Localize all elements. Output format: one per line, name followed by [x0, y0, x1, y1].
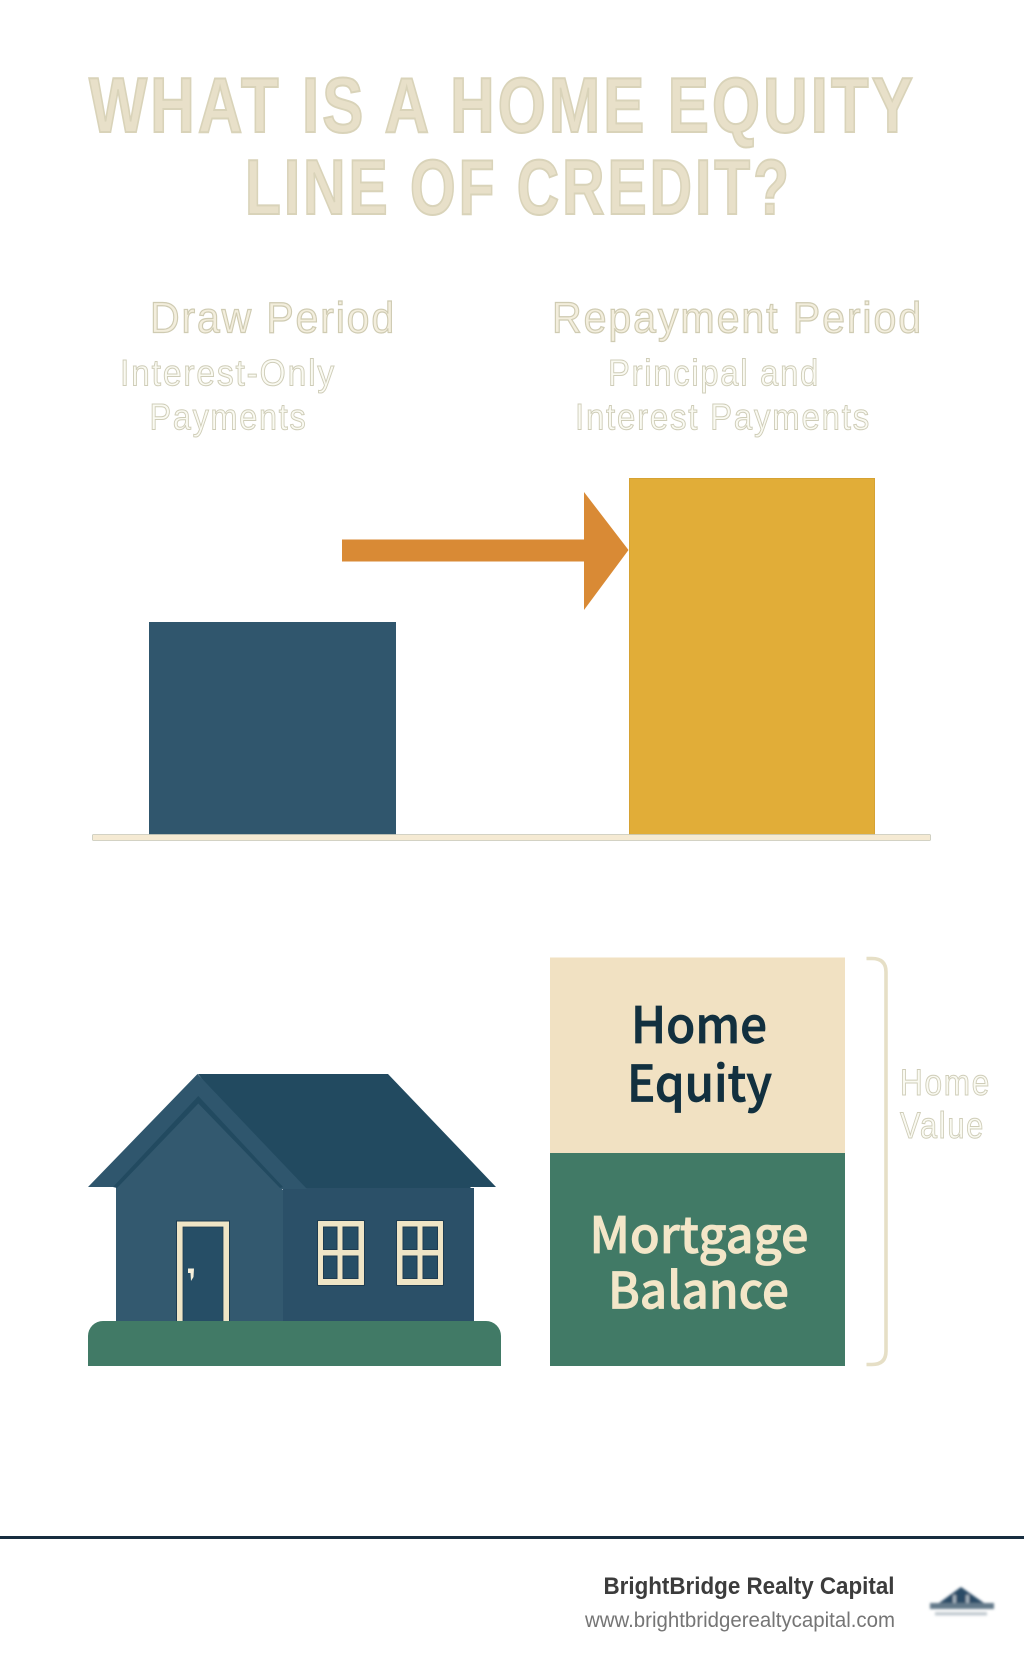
- text: principal and interest payments: Interest Payments: [575, 396, 871, 438]
- label: mortgage balance: Mortgage: [590, 1196, 808, 1268]
- footer rule: [0, 1536, 1024, 1539]
- label: home equity: Equity: [627, 1044, 772, 1116]
- label: mortgage balance: Balance: [608, 1252, 789, 1324]
- window right: [396, 1220, 444, 1286]
- panel: mortgage balance: [550, 1153, 845, 1366]
- repayment period labels: [552, 294, 923, 438]
- bar chart: [92, 478, 930, 840]
- label: home equity: Home: [631, 986, 767, 1058]
- title: [89, 61, 916, 231]
- home value stack: [550, 958, 845, 1366]
- text: interest-only payments: Payments: [150, 396, 308, 438]
- bracket: home value: [866, 958, 886, 1364]
- label: mortgage balance: [590, 1196, 808, 1324]
- chart baseline: [92, 834, 930, 840]
- roof back: [198, 1074, 496, 1189]
- bar: draw period: [149, 622, 396, 835]
- icon: company logo: [930, 1587, 994, 1616]
- heading: draw period: Draw Period: [150, 294, 396, 342]
- roof gable: [88, 1074, 307, 1189]
- text: interest-only payments: [120, 352, 336, 438]
- front wall: [116, 1103, 283, 1322]
- text: principal and interest payments: [575, 352, 871, 438]
- icon: house: [88, 1074, 501, 1366]
- text: interest-only payments: Interest-Only: [120, 352, 336, 394]
- panel: home equity: [550, 958, 845, 1153]
- label: home equity: [627, 986, 772, 1116]
- house side wall: [283, 1188, 474, 1322]
- text: principal and interest payments: Principal and: [608, 352, 820, 394]
- draw period labels: [120, 294, 396, 438]
- window left: [318, 1220, 364, 1286]
- footer company name: BrightBridge Realty Capital: [604, 1573, 894, 1600]
- label: home value: Value: [900, 1105, 985, 1146]
- gable trim: [113, 1096, 283, 1188]
- title: LINE OF CREDIT?: [245, 143, 792, 231]
- door: [176, 1220, 230, 1322]
- heading: repayment period: Repayment Period: [552, 294, 923, 342]
- label: home value: Home: [900, 1062, 991, 1103]
- lawn: [88, 1321, 501, 1366]
- arrow: [342, 492, 628, 610]
- bar: repayment period: [630, 478, 874, 834]
- label: home value: [900, 1062, 991, 1146]
- footer website: www.brightbridgerealtycapital.com: [584, 1609, 895, 1632]
